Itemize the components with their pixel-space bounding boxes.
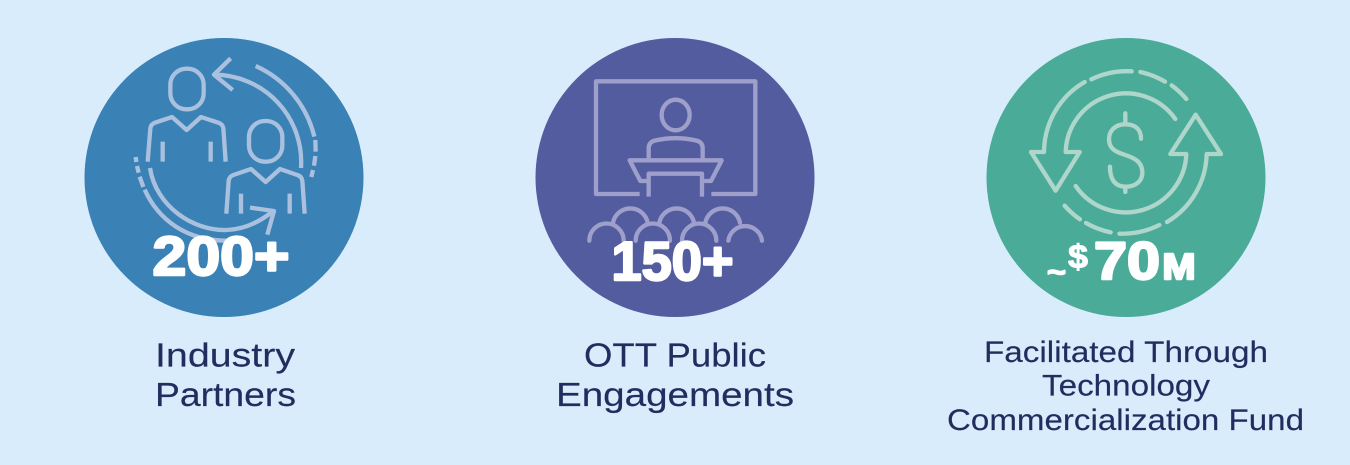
stat: ~$70M	[1047, 232, 1196, 291]
stat: 150+: 150+	[612, 230, 734, 292]
panel: commercialization fund	[947, 38, 1304, 437]
circle: blue	[84, 38, 364, 317]
label: Facilitated Through Technology Commercialization Fund	[947, 336, 1304, 437]
label: Industry Partners	[155, 336, 296, 413]
icon: dollar sign with cycle arrows	[1031, 71, 1221, 234]
label: Facilitated Through Technology Commercialization Fund: Commercialization Fund	[947, 404, 1304, 437]
panel: public engagements	[536, 38, 814, 413]
label: OTT Public Engagements	[556, 336, 794, 413]
label: Facilitated Through Technology Commercialization Fund: Facilitated Through	[984, 336, 1268, 369]
icon: presenter at podium with audience	[589, 81, 762, 241]
label: OTT Public Engagements: OTT Public	[584, 336, 766, 374]
panel: industry partners	[84, 38, 364, 413]
label: Industry Partners: Industry	[155, 336, 296, 374]
stat: ~$70M: ~	[1047, 256, 1066, 289]
stat: ~$70M: 70	[1094, 232, 1160, 291]
label: Industry Partners: Partners	[155, 376, 296, 413]
stat: ~$70M: M	[1162, 246, 1196, 287]
circle: green	[986, 38, 1266, 317]
circle: indigo	[536, 38, 814, 317]
icon: two people with cycle arrows	[136, 58, 316, 241]
stat: ~$70M: $	[1068, 238, 1088, 275]
stat: 200+: 200+	[152, 225, 290, 287]
label: OTT Public Engagements: Engagements	[556, 376, 794, 413]
label: Facilitated Through Technology Commercialization Fund: Technology	[1042, 370, 1210, 402]
